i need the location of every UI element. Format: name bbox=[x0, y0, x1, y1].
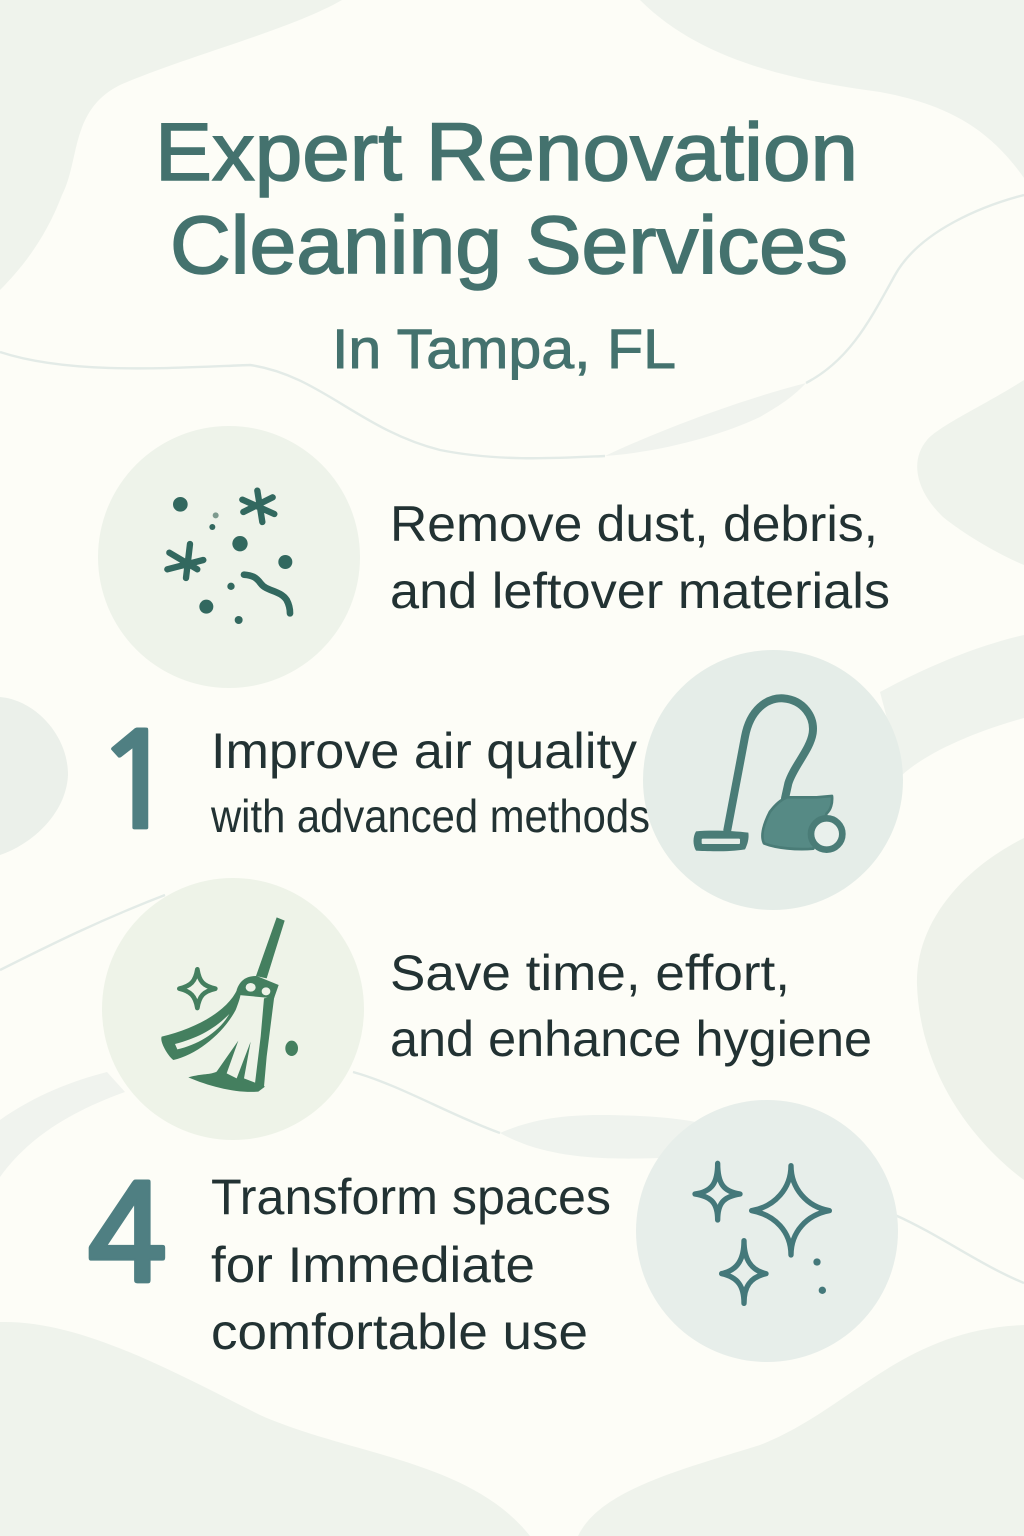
text: improve air quality bbox=[210, 723, 650, 842]
number 1: 1 bbox=[92, 716, 182, 849]
icon: broom bbox=[102, 878, 364, 1140]
text: transform spaces bbox=[211, 1169, 611, 1360]
title bbox=[155, 107, 858, 291]
number 4: 4 bbox=[86, 1169, 168, 1302]
panel: transform spaces bbox=[211, 1100, 898, 1362]
text: improve air quality: with advanced methods bbox=[210, 790, 650, 842]
text: remove dust: Remove dust, debris, bbox=[390, 496, 878, 552]
text: improve air quality: Improve air quality bbox=[211, 723, 637, 779]
text: remove dust: and leftover materials bbox=[390, 563, 890, 619]
text: save time bbox=[390, 945, 872, 1067]
text: save time: Save time, effort, bbox=[390, 945, 790, 1001]
panel: remove dust bbox=[98, 426, 890, 688]
panel: save time bbox=[102, 878, 872, 1140]
subtitle: In Tampa, FL bbox=[332, 317, 676, 380]
text: transform spaces: comfortable use bbox=[211, 1304, 588, 1360]
text: save time: and enhance hygiene bbox=[390, 1011, 872, 1067]
panel: improve air quality bbox=[210, 650, 903, 910]
text: remove dust bbox=[390, 496, 890, 619]
icon: sparkles bbox=[636, 1100, 898, 1362]
icon: vacuum cleaner bbox=[643, 650, 903, 910]
title: Cleaning Services bbox=[170, 200, 848, 291]
icon: dust particles bbox=[98, 426, 360, 688]
text: transform spaces: Transform spaces bbox=[211, 1169, 611, 1225]
text: transform spaces: for Immediate bbox=[211, 1237, 535, 1293]
title: Expert Renovation bbox=[155, 107, 858, 198]
